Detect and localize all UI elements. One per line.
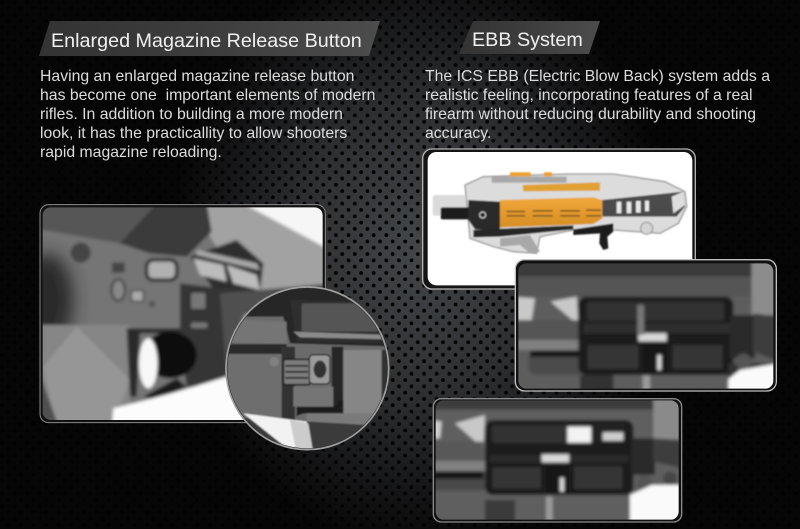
- text block: magazine release description: [40, 68, 375, 161]
- panel: bolt closed photo: [512, 257, 778, 393]
- gearbox illustration: [433, 172, 687, 253]
- heading: EBB System: [459, 21, 600, 54]
- text block: EBB description: accuracy.: [425, 125, 491, 142]
- panel: bolt open photo: [430, 395, 683, 525]
- heading: Enlarged Magazine Release Button: [39, 21, 380, 56]
- text block: magazine release description: Having an enlarged magazine release button: [40, 68, 354, 85]
- text block: EBB description: The ICS EBB (Electric Blow Back) system adds a: [425, 68, 770, 85]
- panel: EBB gearbox cutaway image: [423, 149, 695, 289]
- text block: magazine release description: rifles. In addition to building a more modern: [40, 106, 343, 123]
- text block: EBB description: [425, 68, 770, 142]
- heading: Enlarged Magazine Release Button: Enlarged Magazine Release Button: [51, 30, 362, 52]
- text block: EBB description: firearm without reducing durability and shooting: [425, 106, 756, 123]
- text block: EBB description: realistic feeling, incorporating features of a real: [425, 87, 753, 104]
- panel: magazine release photo: [40, 204, 326, 424]
- callout: magnified release button: [225, 286, 390, 450]
- text block: magazine release description: rapid magazine reloading.: [40, 144, 222, 161]
- heading: EBB System: EBB System: [472, 29, 583, 51]
- text block: magazine release description: has become one important elements of modern: [40, 87, 375, 104]
- text block: magazine release description: look, it has the practicallity to allow shooters: [40, 125, 347, 142]
